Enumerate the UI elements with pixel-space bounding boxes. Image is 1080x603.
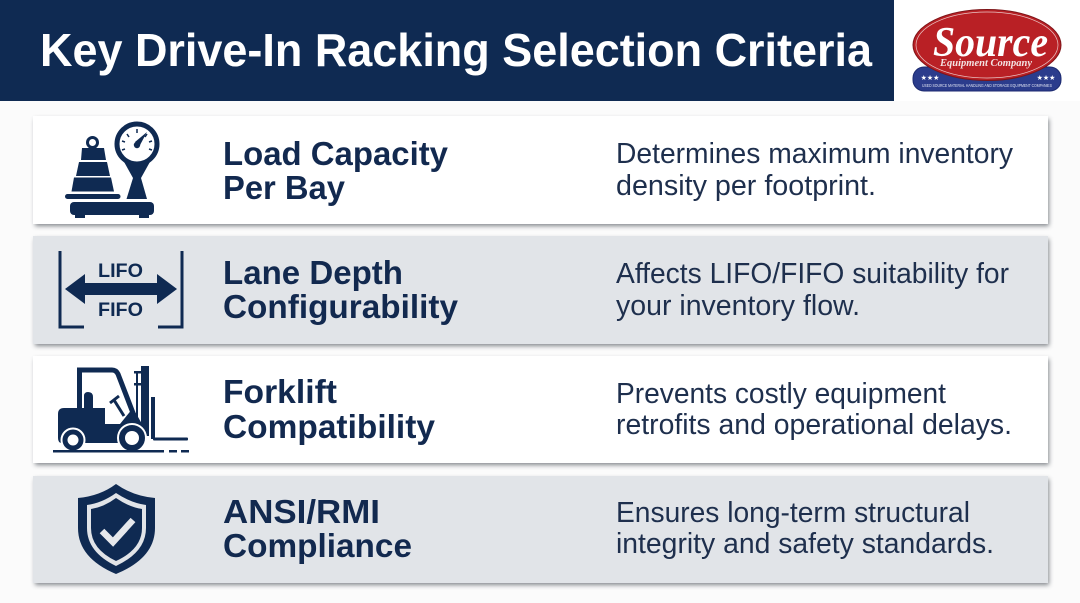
heading: Load Capacity: [223, 136, 448, 173]
panel: forklift compatibility: Compatibility: [223, 409, 435, 446]
icon: forklift: [53, 366, 189, 452]
heading: Lane Depth: [223, 255, 403, 292]
panel: ANSI/RMI compliance: [33, 476, 1049, 585]
description: Determines maximum inventory: [616, 138, 1014, 170]
logo: Source Equipment Company: Source: [933, 20, 1048, 66]
panel: forklift compatibility: [33, 356, 1049, 465]
panel: load capacity per bay: density per footprint.: [616, 170, 876, 202]
icon: LIFO FIFO arrow: FIFO: [98, 299, 143, 321]
logo: Source Equipment Company: Equipment Company: [939, 58, 1032, 69]
logo: Source Equipment Company: [894, 0, 1080, 101]
panel: ANSI/RMI compliance: Compliance: [223, 528, 412, 565]
panel: lane depth configurability: [33, 236, 1049, 346]
logo: Source Equipment Company: ★★★: [1037, 74, 1055, 82]
title: Key Drive-In Racking Selection Criteria: [40, 24, 872, 76]
logo: Source Equipment Company: ★★★: [921, 74, 939, 82]
heading: Forklift: [223, 374, 337, 411]
panel: load capacity per bay: Per Bay: [223, 170, 345, 207]
heading: ANSI/RMI: [223, 494, 380, 531]
description: Ensures long-term structural: [616, 497, 970, 529]
title banner: [0, 0, 894, 101]
panel: lane depth configurability: your inventory flow.: [616, 290, 860, 322]
panel: load capacity per bay: [33, 116, 1049, 226]
description: Affects LIFO/FIFO suitability for: [616, 258, 1010, 290]
icon: shield with check: [78, 484, 155, 574]
icon: LIFO FIFO arrow: [60, 251, 182, 327]
panel: ANSI/RMI compliance: integrity and safety standards.: [616, 528, 994, 560]
panel: forklift compatibility: retrofits and operational delays.: [616, 409, 1012, 441]
icon: weights and scale: [65, 124, 157, 218]
description: Prevents costly equipment: [616, 378, 946, 410]
panel: lane depth configurability: Configurability: [223, 289, 458, 326]
icon: LIFO FIFO arrow: LIFO: [98, 260, 143, 282]
